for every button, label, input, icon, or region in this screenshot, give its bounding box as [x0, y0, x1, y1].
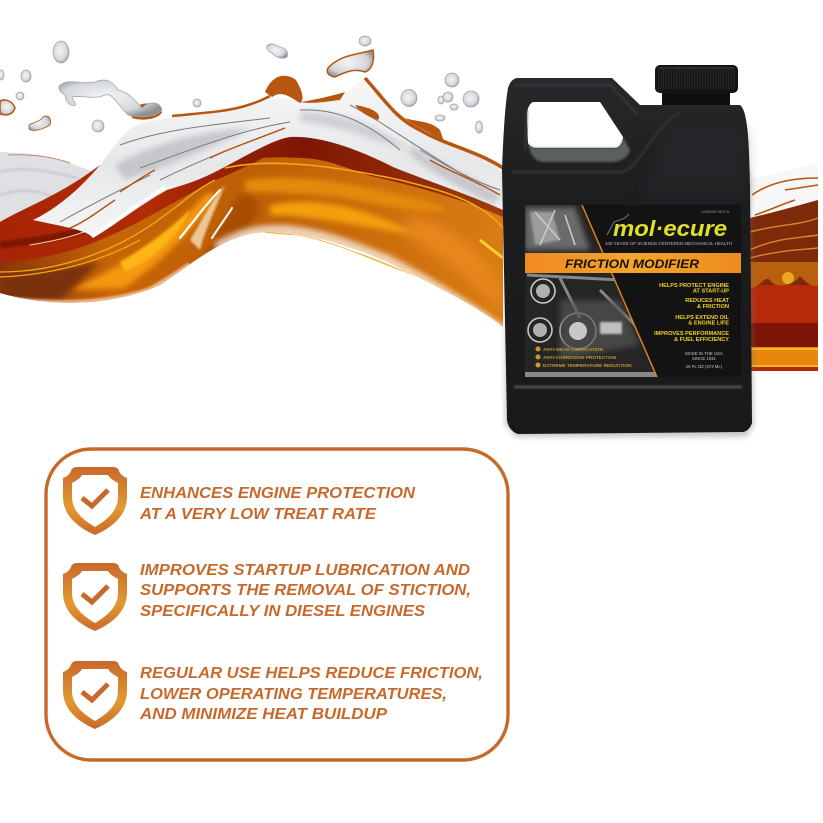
benefits panel	[46, 449, 508, 760]
benefit 3 text	[139, 665, 483, 723]
silver crest	[33, 77, 503, 238]
orange band	[525, 253, 741, 273]
panel border	[46, 449, 508, 760]
golden swirl lines	[0, 163, 503, 277]
benefit 3 text: LOWER OPERATING TEMPERATURES,	[140, 686, 447, 703]
silver streaks	[60, 105, 500, 238]
engine photo	[525, 205, 660, 377]
yellow under edge	[262, 232, 420, 277]
white glints	[30, 190, 232, 245]
product name: FRICTION MODIFIER	[565, 257, 699, 271]
logo molecule mark	[607, 214, 629, 235]
oil main body	[0, 125, 503, 327]
label protections	[536, 346, 632, 368]
benefit 3 text: AND MINIMIZE HEAT BUILDUP	[139, 706, 387, 723]
brand logo: mol·ecure	[613, 216, 727, 241]
label benefits: & FRICTION	[697, 304, 729, 310]
origin and volume: MADE IN THE USA	[685, 351, 723, 356]
label benefits	[654, 283, 730, 343]
back left silver wave	[0, 152, 94, 222]
bottle cap	[655, 65, 738, 106]
label slashes	[582, 205, 657, 377]
label benefits: & FUEL EFFICIENCY	[674, 337, 729, 343]
origin and volume	[685, 351, 723, 369]
icon: shield check 3	[63, 661, 127, 729]
product bottle	[502, 65, 754, 437]
label protections: ANTI-CORROSION PROTECTION	[543, 355, 617, 360]
benefit 1 text: AT A VERY LOW TREAT RATE	[139, 506, 377, 523]
origin and volume: SINCE 1931	[692, 356, 717, 361]
oil highlights	[0, 178, 503, 335]
label benefits: REDUCES HEAT	[685, 298, 730, 304]
oil splash wave	[0, 36, 818, 371]
orange fringe on crest	[172, 78, 503, 168]
product label	[525, 205, 741, 377]
handle opening	[527, 102, 623, 148]
handle inner grey	[528, 137, 630, 162]
benefit 2 text	[140, 562, 471, 620]
icon: shield check 2	[63, 563, 127, 631]
bottle body	[502, 78, 752, 434]
label benefits: IMPROVES PERFORMANCE	[654, 331, 729, 337]
label benefits: & ENGINE LIFE	[688, 320, 729, 326]
label protections: EXTREME TEMPERATURE REDUCTION	[543, 363, 632, 368]
benefit 2 text: SPECIFICALLY IN DIESEL ENGINES	[140, 603, 425, 620]
benefit 2 text: IMPROVES STARTUP LUBRICATION AND	[140, 562, 470, 579]
label protections: ANTI-WEAR LUBRICATION	[543, 347, 604, 352]
moulded highlights	[512, 85, 742, 387]
benefit 2 text: SUPPORTS THE REMOVAL OF STICTION,	[140, 582, 471, 599]
brand tagline: 100 YEARS OF SCIENCE-CENTERED MECHANICAL HEALTH	[605, 241, 732, 246]
label benefits: HELPS EXTEND OIL	[675, 315, 730, 321]
benefit 1 text: ENHANCES ENGINE PROTECTION	[140, 485, 415, 502]
bottle shadow	[505, 170, 754, 437]
right wave segment	[750, 162, 818, 371]
label benefits: HELPS PROTECT ENGINE	[659, 283, 729, 289]
benefit 3 text: REGULAR USE HELPS REDUCE FRICTION,	[140, 665, 483, 682]
revision code: 1115030 REV A	[701, 209, 729, 214]
benefit 1 text	[139, 485, 415, 523]
origin and volume: 16 FL OZ (473 ML)	[686, 364, 723, 369]
crest oil blobs	[130, 76, 445, 145]
label benefits: AT START-UP	[693, 288, 729, 294]
dark red band	[0, 120, 503, 263]
droplets and splashes	[0, 36, 482, 133]
icon: shield check 1	[63, 467, 127, 535]
